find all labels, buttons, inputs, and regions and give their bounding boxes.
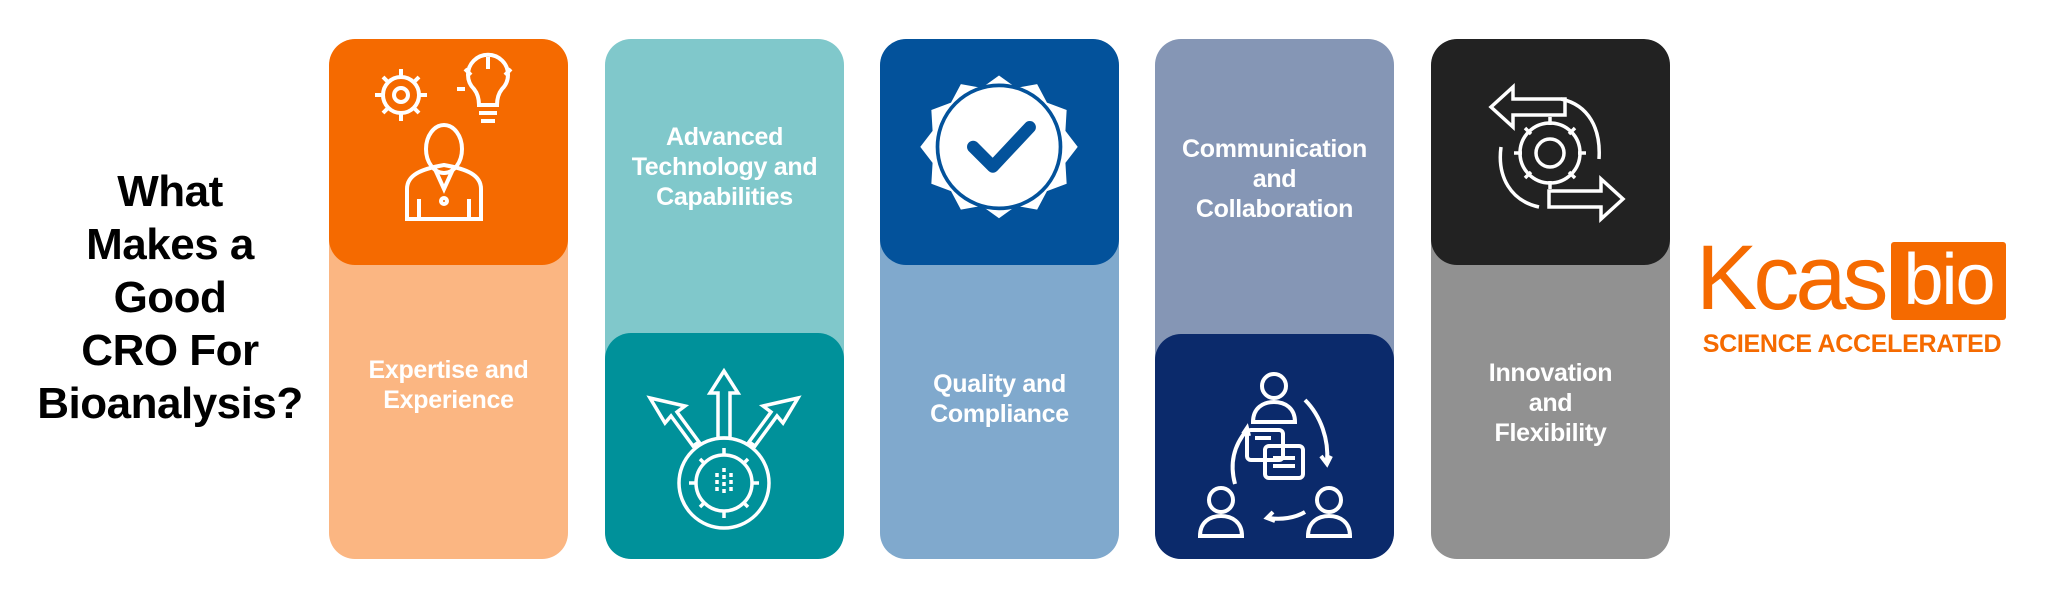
- icon: gear with arrows: [605, 333, 844, 559]
- panel: innovation: [1431, 39, 1670, 559]
- title: Bioanalysis?: [37, 379, 303, 428]
- logo wordmark: [1696, 227, 2006, 329]
- icon: person with gear and bulb: [329, 39, 568, 265]
- panel: expertise: [329, 39, 568, 559]
- text: communication: [1182, 135, 1367, 223]
- panel: communication: [1155, 39, 1394, 559]
- logo wordmark: bio: [1903, 240, 1994, 320]
- text: quality: [930, 370, 1069, 428]
- text: innovation: [1489, 359, 1612, 447]
- title: Good: [114, 273, 226, 322]
- text: expertise: Experience: [383, 386, 514, 414]
- text: innovation: Innovation: [1489, 359, 1612, 387]
- title: [37, 167, 303, 428]
- title: Makes a: [86, 220, 254, 269]
- text: innovation: and: [1529, 389, 1572, 417]
- icon: check badge: [880, 39, 1119, 265]
- tagline: SCIENCE ACCELERATED: [1703, 330, 2001, 358]
- title: What: [117, 167, 223, 216]
- icon: gear with cycle arrows: [1431, 39, 1670, 265]
- text: expertise: [368, 356, 529, 414]
- text: technology: Advanced: [666, 123, 783, 151]
- panel: quality: [880, 39, 1119, 559]
- text: communication: Communication: [1182, 135, 1367, 163]
- text: communication: Collaboration: [1196, 195, 1353, 223]
- panel: technology: [605, 39, 844, 559]
- text: technology: Capabilities: [656, 183, 793, 211]
- text: communication: and: [1253, 165, 1296, 193]
- logo wordmark: Kcas: [1696, 227, 1885, 329]
- logo: kcas bio: [1696, 227, 2006, 358]
- text: technology: Technology and: [632, 153, 817, 181]
- text: innovation: Flexibility: [1494, 419, 1606, 447]
- icon: people collaborating: [1155, 334, 1394, 560]
- text: expertise: Expertise and: [368, 356, 529, 384]
- text: quality: Quality and: [933, 370, 1066, 398]
- text: quality: Compliance: [930, 400, 1069, 428]
- text: technology: [632, 123, 817, 211]
- title: CRO For: [81, 326, 259, 375]
